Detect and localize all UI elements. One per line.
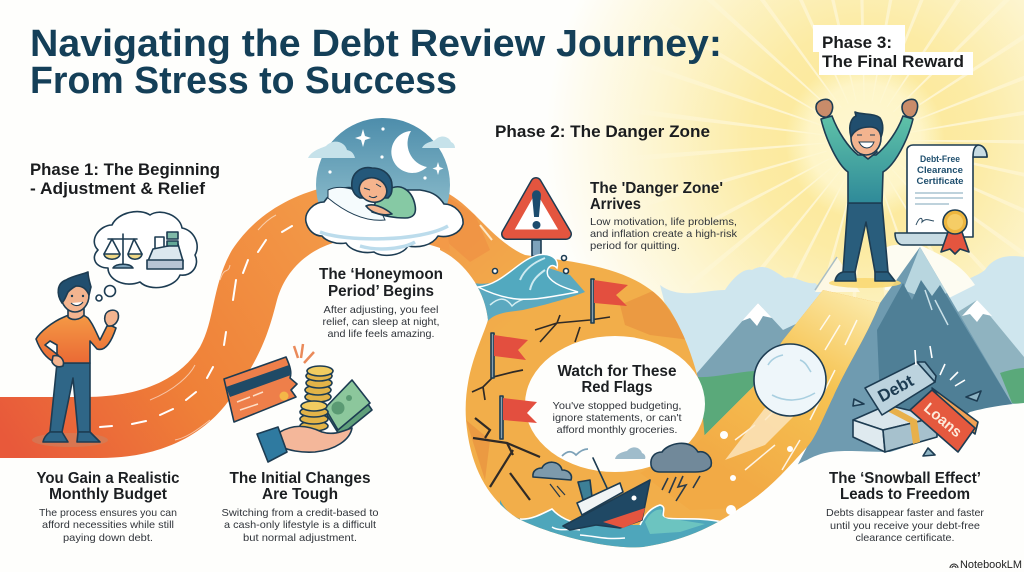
text: honeymoon period: Period’ Begins xyxy=(328,283,434,300)
icon: loans block: Loans xyxy=(920,400,965,441)
text: snowball effect: until you receive your debt-free xyxy=(830,520,980,532)
foreground white snow xyxy=(640,403,1024,572)
phase 2 heading: Phase 2: The Danger Zone xyxy=(495,123,710,141)
icon: debt-free clearance certificate: Certificate xyxy=(916,176,964,186)
icon: rolling snowball xyxy=(725,344,826,460)
icon: night sky circle xyxy=(308,118,455,252)
text: red flags xyxy=(552,363,682,436)
icon: storm clouds and sinking ship xyxy=(533,443,711,530)
text: danger zone arrives: and inflation create a high-risk xyxy=(590,228,738,240)
icon: red flags and cracks xyxy=(472,279,628,500)
phase 3 heading: Phase 3: xyxy=(822,34,892,52)
text: snowball effect: Leads to Freedom xyxy=(840,486,970,503)
phase 1 heading xyxy=(30,161,220,198)
icon: debt and loans blocks xyxy=(853,346,981,456)
phase 3 heading xyxy=(813,25,973,75)
text: honeymoon period: relief, can sleep at night, xyxy=(322,316,440,328)
path: orange road xyxy=(0,186,450,458)
icon: thought bubble xyxy=(94,212,197,301)
text: initial changes: The Initial Changes xyxy=(230,470,370,487)
text: snowball effect: Debts disappear faster and faster xyxy=(826,507,985,519)
icon: coin stacks xyxy=(300,366,333,431)
text: red flags: afford monthly groceries. xyxy=(556,424,678,436)
icon: fluffy cloud xyxy=(306,188,463,255)
icon: open box xyxy=(853,405,937,452)
icon: debt block: Debt xyxy=(875,371,917,406)
icon: open hand xyxy=(280,426,352,452)
phase 1 heading: Phase 1: The Beginning xyxy=(30,161,220,179)
icon: debt-free clearance certificate xyxy=(895,145,987,254)
text: red flags: ignore statements, or can't xyxy=(552,412,682,424)
icon: sleeping person xyxy=(328,168,415,220)
title: Navigating the Debt Review Journey: xyxy=(30,23,722,65)
sun glow xyxy=(545,0,1024,460)
text: honeymoon period: After adjusting, you feel xyxy=(324,304,438,316)
mountains xyxy=(660,245,1024,470)
text: snowball effect xyxy=(826,470,985,544)
icon: cash stack xyxy=(327,385,372,436)
text: realistic budget: paying down debt. xyxy=(63,532,153,544)
text: realistic budget: afford necessities while still xyxy=(42,519,174,531)
title: From Stress to Success xyxy=(30,60,457,102)
title xyxy=(30,23,722,102)
text: red flags: You've stopped budgeting, xyxy=(552,400,682,412)
panel: phase 1 person with thought bubble xyxy=(32,212,197,447)
panel: honeymoon night sky and sleeper xyxy=(306,118,463,255)
text: initial changes: Are Tough xyxy=(262,486,338,503)
text: initial changes: Switching from a credit-based to xyxy=(222,507,379,519)
icon: tilted ship xyxy=(563,458,650,530)
text: danger zone arrives: period for quitting. xyxy=(590,240,680,252)
icon: warning sign on wave xyxy=(478,183,578,299)
phase 3 heading: The Final Reward xyxy=(822,53,964,71)
text: danger zone arrives: Arrives xyxy=(590,196,641,213)
text: red flags: Red Flags xyxy=(582,379,652,396)
text: initial changes xyxy=(222,470,379,544)
panel: red flags white oval xyxy=(525,336,705,472)
icon: debt-free clearance certificate: Debt-Free xyxy=(920,154,960,164)
text: danger zone arrives xyxy=(590,180,738,252)
text: realistic budget xyxy=(36,470,180,544)
text: snowball effect: clearance certificate. xyxy=(856,532,954,544)
text: honeymoon period: and life feels amazing. xyxy=(328,328,434,340)
text: initial changes: but normal adjustment. xyxy=(243,532,357,544)
phase 1 heading: - Adjustment & Relief xyxy=(30,180,206,198)
text: danger zone arrives: The 'Danger Zone' xyxy=(590,180,723,197)
icon: tsunami wave xyxy=(478,254,578,299)
text: initial changes: a cash-only lifestyle is a difficult xyxy=(224,519,376,531)
watermark: NotebookLM: NotebookLM xyxy=(960,559,1022,571)
icon: celebrating person at summit xyxy=(816,99,918,288)
text: honeymoon period xyxy=(319,266,443,340)
text: realistic budget: The process ensures you can xyxy=(39,507,177,519)
icon: thinking man xyxy=(32,272,118,447)
path: danger zone swirl and ribbon to the summit xyxy=(440,190,880,560)
text: snowball effect: The ‘Snowball Effect’ xyxy=(829,470,981,487)
text: honeymoon period: The ‘Honeymoon xyxy=(319,266,443,283)
text: realistic budget: You Gain a Realistic xyxy=(36,470,180,487)
text: realistic budget: Monthly Budget xyxy=(49,486,167,503)
icon: debt-free clearance certificate: Clearance xyxy=(917,165,963,175)
text: danger zone arrives: Low motivation, life problems, xyxy=(590,216,737,228)
text: red flags: Watch for These xyxy=(558,363,677,380)
icon: credit card, coins, cash and hand xyxy=(224,344,372,462)
